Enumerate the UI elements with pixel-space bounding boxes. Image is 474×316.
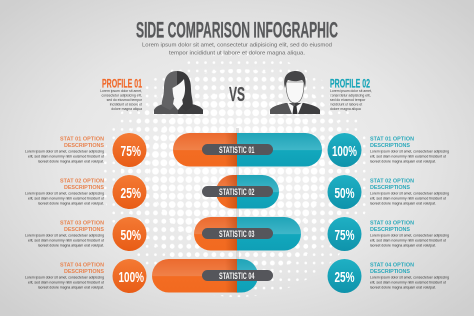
right circles: 100% (332, 143, 357, 160)
vs: VS (229, 84, 245, 106)
row 2 right text (370, 178, 449, 206)
icon: man (270, 71, 320, 114)
right circles: 25% (334, 269, 354, 286)
row 2 right text: Lorem ipsum dolor sit amet, consectetuer adipiscing (370, 192, 449, 196)
row 2 left text: elit, sed diam nonummy nibh euismod tincidunt ut (28, 196, 104, 200)
row 1 right text: DESCRIPTIONS (370, 143, 410, 149)
statistic pills: STATISTIC 03 (219, 229, 254, 239)
row 3 left text (25, 220, 104, 248)
row 1 left text: DESCRIPTIONS (64, 143, 104, 149)
subtitle: tempor incididunt ut labore et dolore magna aliqua. (169, 50, 305, 56)
left circles: 75% (120, 143, 141, 160)
row 3 right text: elit, sed diam nonummy nibh euismod tincidunt ut (370, 238, 446, 242)
row 3 left text: STAT 03 OPTION (60, 220, 104, 226)
profile 02: PROFILE 02 (330, 76, 370, 90)
subtitle (142, 42, 332, 56)
row 2 left text: STAT 02 OPTION (60, 178, 104, 184)
profile 02: consectetur adipisicing elit, (330, 94, 371, 98)
row 3 left text: DESCRIPTIONS (64, 227, 104, 233)
row 1 right text: STAT 01 OPTION (370, 136, 414, 142)
profile 02: sed do eiusmod tempor (330, 98, 366, 102)
profile 01: sed do eiusmod tempor (107, 98, 143, 102)
row 4 left text (25, 262, 104, 290)
row 2 right text: elit, sed diam nonummy nibh euismod tincidunt ut (370, 196, 446, 200)
icon: woman (154, 71, 203, 114)
profile 01: consectetur adipisicing elit, (101, 94, 142, 98)
profile 02: dolore magna aliqua (330, 107, 361, 111)
right circles: 50% (334, 185, 354, 202)
row 4 right text: laoreet dolore magna aliquam erat volutpat. (370, 286, 436, 290)
statistic pills: STATISTIC 01 (219, 145, 254, 155)
row 1 right text: laoreet dolore magna aliquam erat volutpat. (370, 160, 436, 164)
left circles: 25% (120, 185, 141, 202)
row 2 right text: STAT 02 OPTION (370, 178, 414, 184)
row 3 left text: Lorem ipsum dolor sit amet, consectetuer adipiscing (25, 234, 104, 238)
profile 01 (100, 76, 143, 111)
profile 02: incididunt ut labore et (330, 102, 362, 106)
row 2 left text: DESCRIPTIONS (64, 185, 104, 191)
row 2 left text (25, 178, 104, 206)
left circles: 100% (118, 269, 144, 286)
row 4 right text: DESCRIPTIONS (370, 269, 410, 275)
row 3 right text: STAT 03 OPTION (370, 220, 414, 226)
row 3 right text: Lorem ipsum dolor sit amet, consectetuer adipiscing (370, 234, 449, 238)
bars right (237, 133, 322, 292)
bars left (152, 133, 237, 292)
row 3 right text (370, 220, 449, 248)
row 3 right text: laoreet dolore magna aliquam erat volutpat. (370, 244, 436, 248)
row 4 left text: laoreet dolore magna aliquam erat volutpat. (38, 286, 104, 290)
row 4 right text: elit, sed diam nonummy nibh euismod tincidunt ut (370, 280, 446, 284)
left circles (112, 133, 146, 293)
row 3 right text: DESCRIPTIONS (370, 227, 410, 233)
row 2 right text: laoreet dolore magna aliquam erat volutpat. (370, 202, 436, 206)
row 1 left text (25, 136, 104, 164)
row 1 left text: STAT 01 OPTION (60, 136, 104, 142)
row 1 right text: Lorem ipsum dolor sit amet, consectetuer adipiscing (370, 150, 449, 154)
row 3 left text: laoreet dolore magna aliquam erat volutpat. (38, 244, 104, 248)
profile 01: incididunt ut labore et (110, 102, 142, 106)
row 4 right text: STAT 04 OPTION (370, 262, 414, 268)
right circles (328, 133, 362, 293)
row 1 left text: Lorem ipsum dolor sit amet, consectetuer adipiscing (25, 150, 104, 154)
row 1 right text (370, 136, 449, 164)
row 2 left text: laoreet dolore magna aliquam erat volutpat. (38, 202, 104, 206)
row 4 left text: elit, sed diam nonummy nibh euismod tincidunt ut (28, 280, 104, 284)
profile 02: Lorem ipsum dolor sit amet, (330, 89, 372, 93)
right circles: 75% (334, 227, 354, 244)
left circles: 50% (120, 227, 141, 244)
row 4 right text: Lorem ipsum dolor sit amet, consectetuer adipiscing (370, 276, 449, 280)
row 1 left text: laoreet dolore magna aliquam erat volutpat. (38, 160, 104, 164)
statistic pills (202, 144, 273, 281)
profile 02 (330, 76, 372, 111)
row 3 left text: elit, sed diam nonummy nibh euismod tincidunt ut (28, 238, 104, 242)
subtitle: Lorem ipsum dolor sit amet, consectetur adipisicing elit, sed do eiusmod (142, 42, 332, 48)
profile 01: dolore magna aliqua (111, 107, 142, 111)
profile 01: PROFILE 01 (102, 76, 142, 90)
statistic pills: STATISTIC 02 (219, 187, 254, 197)
row 4 left text: Lorem ipsum dolor sit amet, consectetuer adipiscing (25, 276, 104, 280)
row 4 left text: STAT 04 OPTION (60, 262, 104, 268)
row 4 left text: DESCRIPTIONS (64, 269, 104, 275)
row 2 right text: DESCRIPTIONS (370, 185, 410, 191)
row 4 right text (370, 262, 449, 290)
profile 01: Lorem ipsum dolor sit amet, (100, 89, 142, 93)
statistic pills: STATISTIC 04 (219, 271, 254, 281)
row 2 left text: Lorem ipsum dolor sit amet, consectetuer adipiscing (25, 192, 104, 196)
row 1 left text: elit, sed diam nonummy nibh euismod tincidunt ut (28, 154, 104, 158)
row 1 right text: elit, sed diam nonummy nibh euismod tincidunt ut (370, 154, 446, 158)
